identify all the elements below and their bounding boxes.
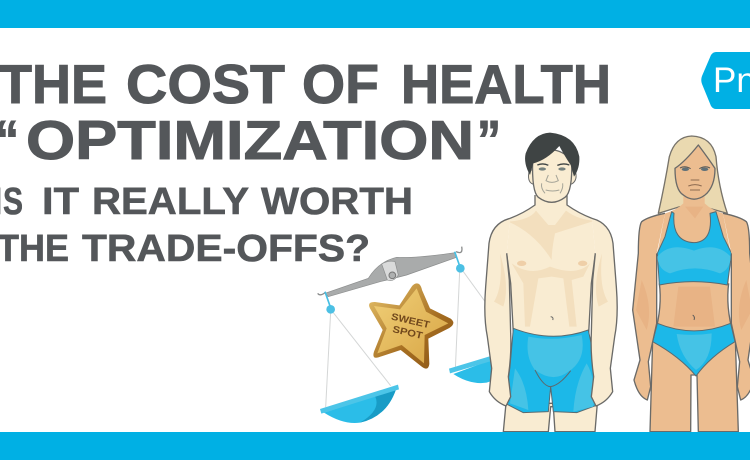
bottom banner <box>0 432 750 460</box>
sweet spot star <box>369 283 453 369</box>
subtitle: S <box>3 181 23 223</box>
man head <box>525 133 579 202</box>
title: OF <box>302 53 379 115</box>
logo: Pn badge <box>701 52 750 109</box>
woman arms <box>633 213 750 400</box>
top banner <box>0 0 750 28</box>
title: ” <box>477 109 501 171</box>
title: OPTIMIZATION <box>26 109 474 171</box>
right pan <box>449 350 513 383</box>
subtitle: IT <box>42 181 79 223</box>
woman briefs <box>653 323 735 376</box>
title: THE <box>0 53 107 115</box>
subtitle: TRADE-OFFS? <box>82 228 370 270</box>
scale strings <box>326 271 509 407</box>
woman bra <box>657 212 732 285</box>
title: HEALTH <box>401 53 611 115</box>
subtitle: REALLY <box>92 181 249 223</box>
woman torso <box>653 193 735 343</box>
beam <box>318 247 462 297</box>
woman hair <box>658 136 727 213</box>
subtitle: WORTH <box>261 181 413 223</box>
left pan <box>320 385 399 423</box>
man torso <box>507 195 595 347</box>
woman legs <box>650 340 738 432</box>
man legs <box>503 403 597 432</box>
title: COST <box>126 53 285 115</box>
sweet spot star: SPOT <box>391 324 424 342</box>
man arms <box>485 218 617 406</box>
balance scale <box>318 247 513 423</box>
title <box>0 53 611 171</box>
scale rings <box>325 252 465 314</box>
man figure <box>485 133 617 432</box>
sweet spot star: SWEET <box>390 312 431 331</box>
subtitle <box>0 181 413 270</box>
woman head <box>675 145 715 199</box>
woman figure <box>633 136 750 432</box>
man shorts <box>505 328 597 413</box>
